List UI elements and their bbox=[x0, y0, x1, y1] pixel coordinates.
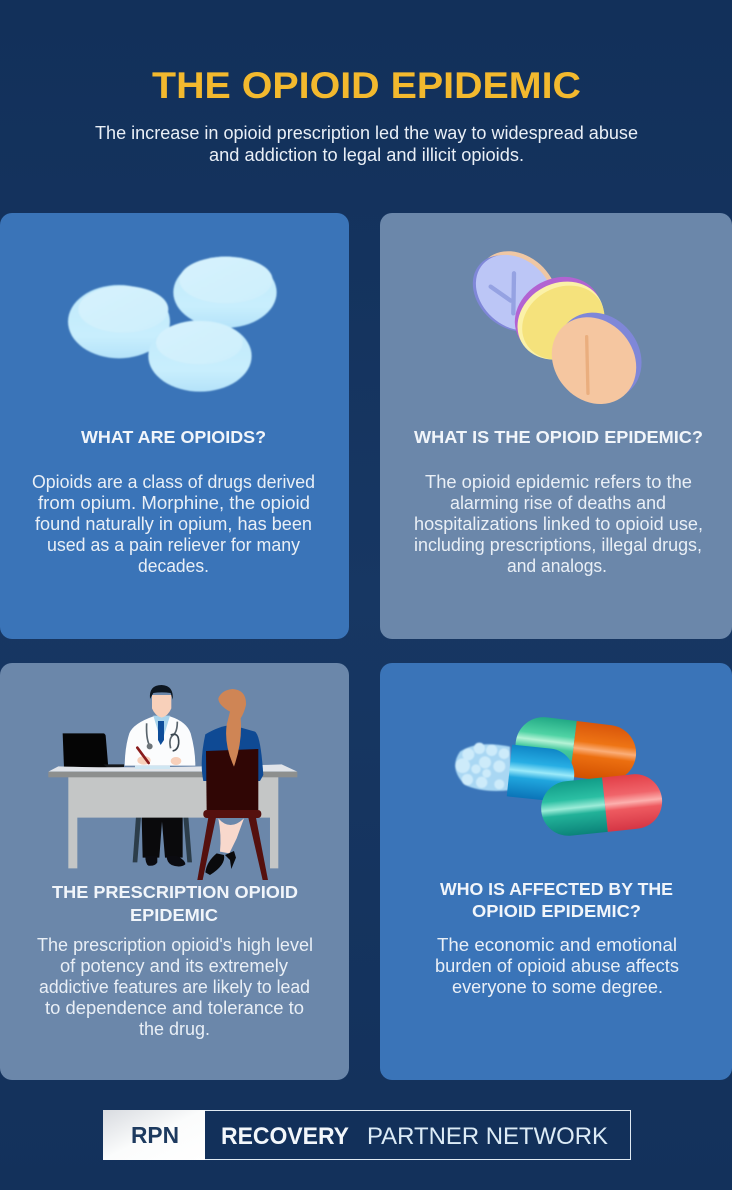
heading: WHAT ARE OPIOIDS? bbox=[81, 427, 266, 447]
heading: EPIDEMIC bbox=[130, 905, 218, 925]
panel: the prescription opioid epidemic bbox=[0, 663, 349, 1080]
heading: WHO IS AFFECTED BY THE bbox=[440, 879, 673, 899]
heading: OPIOID EPIDEMIC? bbox=[472, 901, 641, 921]
subtitle bbox=[95, 123, 638, 165]
body text bbox=[414, 472, 703, 576]
heading bbox=[52, 882, 298, 925]
icon: coloured tablets bbox=[457, 236, 659, 421]
body text: found naturally in opium, has been bbox=[35, 514, 312, 534]
icon: white tablets bbox=[68, 257, 277, 392]
logo: Recovery Partner Network: RPN bbox=[131, 1122, 179, 1148]
body text: including prescriptions, illegal drugs, bbox=[414, 535, 702, 555]
logo: Recovery Partner Network: PARTNER NETWORK bbox=[367, 1123, 608, 1150]
icon: capsules bbox=[455, 714, 665, 839]
body text bbox=[37, 935, 313, 1039]
heading: WHAT IS THE OPIOID EPIDEMIC? bbox=[414, 427, 703, 447]
body text bbox=[32, 472, 315, 576]
body text: The economic and emotional bbox=[437, 935, 677, 955]
logo: Recovery Partner Network bbox=[103, 1110, 630, 1160]
body text: and analogs. bbox=[507, 556, 607, 576]
body text: used as a pain reliever for many bbox=[47, 535, 300, 555]
body text: The prescription opioid's high level bbox=[37, 935, 313, 955]
heading bbox=[440, 879, 673, 921]
body text: alarming rise of deaths and bbox=[450, 493, 666, 513]
body text: decades. bbox=[138, 556, 209, 576]
body text: addictive features are likely to lead bbox=[39, 977, 310, 997]
body text: from opium. Morphine, the opioid bbox=[38, 493, 310, 513]
panel: what are opioids bbox=[0, 213, 349, 639]
logo: Recovery Partner Network: RECOVERY bbox=[221, 1123, 349, 1150]
body text bbox=[435, 935, 679, 997]
illustration: doctor and patient at desk bbox=[48, 685, 297, 880]
panel: who is affected bbox=[380, 663, 732, 1080]
body text: hospitalizations linked to opioid use, bbox=[414, 514, 703, 534]
body text: The opioid epidemic refers to the bbox=[425, 472, 692, 492]
body text: of potency and its extremely bbox=[60, 956, 288, 976]
title: THE OPIOID EPIDEMIC bbox=[152, 65, 581, 106]
panel: what is the opioid epidemic bbox=[380, 213, 732, 639]
subtitle: The increase in opioid prescription led the way to widespread abuse bbox=[95, 123, 638, 143]
body text: burden of opioid abuse affects bbox=[435, 956, 679, 976]
body text: everyone to some degree. bbox=[452, 977, 663, 997]
body text: to dependence and tolerance to bbox=[45, 998, 304, 1018]
body text: the drug. bbox=[139, 1019, 210, 1039]
subtitle: and addiction to legal and illicit opioids. bbox=[209, 145, 524, 165]
body text: Opioids are a class of drugs derived bbox=[32, 472, 315, 492]
heading: THE PRESCRIPTION OPIOID bbox=[52, 882, 298, 902]
